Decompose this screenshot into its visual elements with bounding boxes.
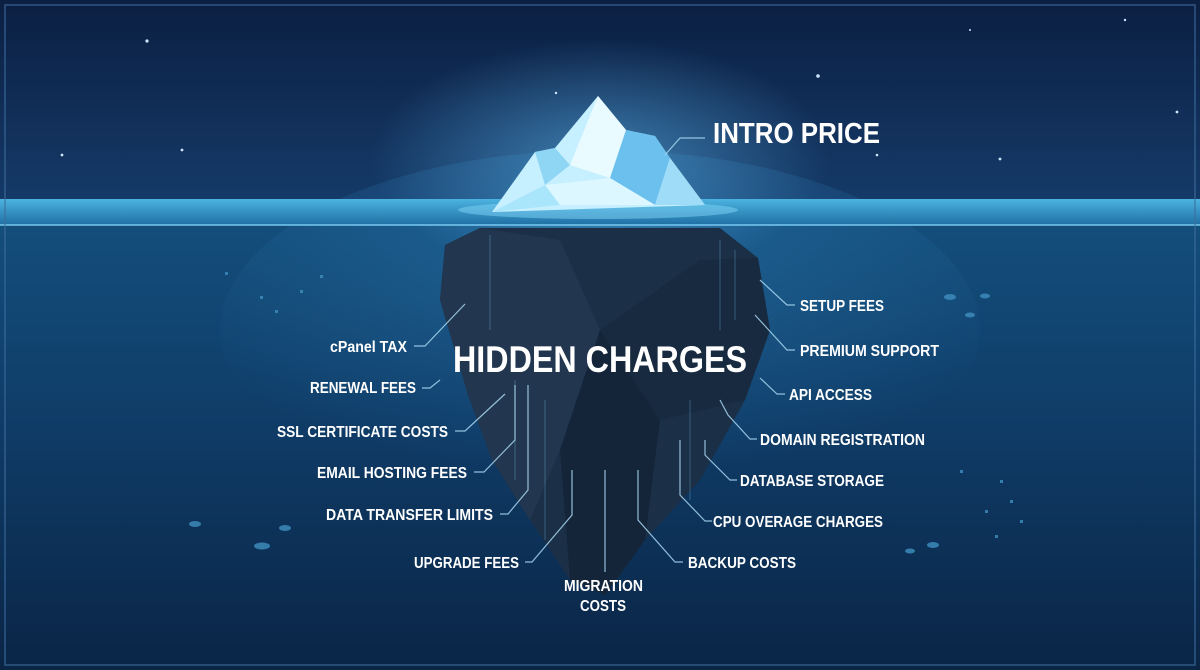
- labels left: DATA TRANSFER LIMITS: [326, 507, 493, 524]
- labels left: SSL CERTIFICATE COSTS: [277, 424, 448, 441]
- labels right: PREMIUM SUPPORT: [800, 343, 939, 360]
- label: migration costs: MIGRATION: [564, 578, 643, 595]
- title: intro price: INTRO PRICE: [713, 118, 880, 150]
- labels right: CPU OVERAGE CHARGES: [713, 514, 883, 531]
- iceberg underwater: [440, 228, 770, 595]
- labels right: BACKUP COSTS: [688, 555, 796, 572]
- stars: [61, 19, 1178, 160]
- water surface band: [0, 199, 1200, 225]
- labels left: RENEWAL FEES: [310, 380, 416, 397]
- labels right: DATABASE STORAGE: [740, 473, 884, 490]
- labels left: UPGRADE FEES: [414, 555, 519, 572]
- background sea: [0, 200, 1200, 670]
- title: hidden charges: HIDDEN CHARGES: [453, 339, 747, 380]
- labels right: SETUP FEES: [800, 298, 884, 315]
- fish and particles: [189, 272, 1023, 554]
- iceberg tip: [458, 96, 738, 219]
- background sky: [0, 0, 1200, 200]
- label: migration costs: [564, 578, 643, 615]
- labels right: API ACCESS: [789, 387, 872, 404]
- labels left: EMAIL HOSTING FEES: [317, 465, 467, 482]
- labels right: DOMAIN REGISTRATION: [760, 432, 925, 449]
- labels right: [688, 298, 939, 572]
- labels left: cPanel TAX: [330, 339, 407, 356]
- connector lines: [414, 138, 795, 572]
- label: migration costs: COSTS: [580, 598, 626, 615]
- labels left: [277, 339, 519, 572]
- glow behind iceberg: [370, 40, 830, 280]
